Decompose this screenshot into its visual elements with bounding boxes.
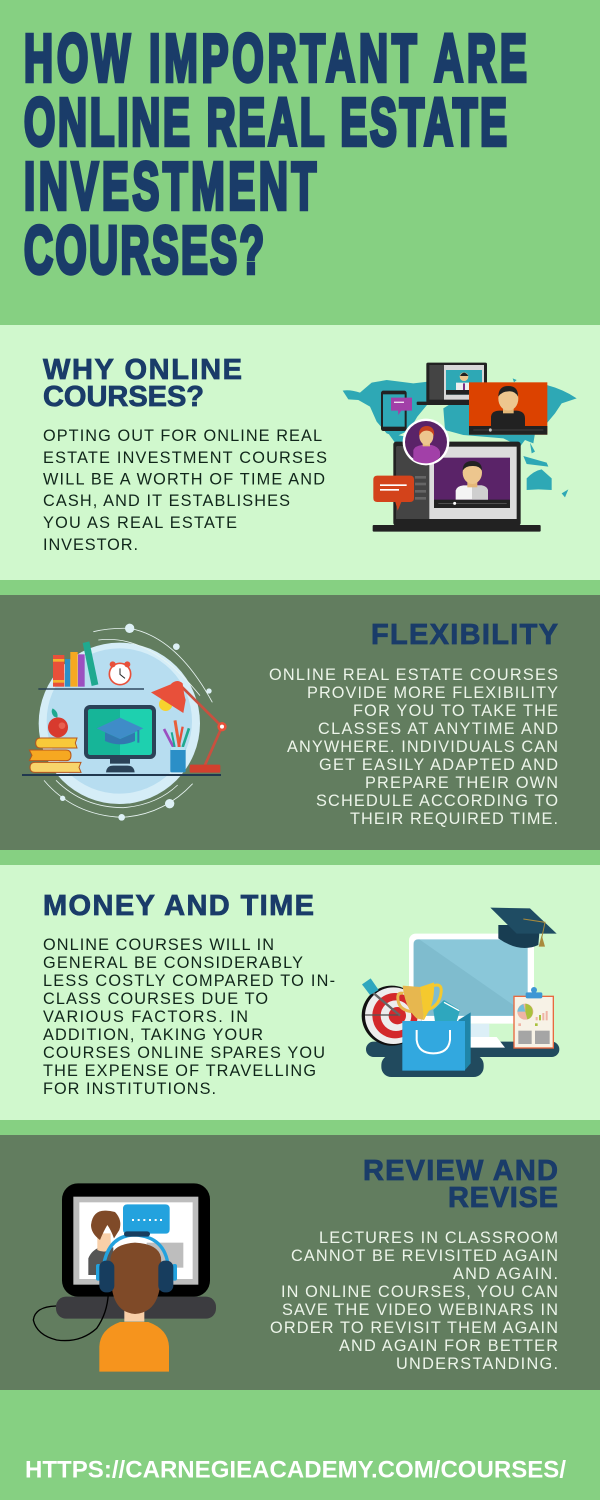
panel: money and time <box>0 865 600 1120</box>
text block: money and time: LESS COSTLY COMPARED TO IN- <box>43 972 335 990</box>
heading: why online courses: COURSES? <box>43 381 204 413</box>
alarm clock <box>109 661 131 685</box>
text block: why online courses: INVESTOR. <box>43 536 138 554</box>
text block: flexibility: SCHEDULE ACCORDING TO <box>316 792 558 810</box>
apple and books <box>29 708 81 772</box>
text block: why online courses: ESTATE INVESTMENT COURSES <box>43 449 327 467</box>
text block: review and revise: CANNOT BE REVISITED AGAIN <box>291 1247 558 1265</box>
text block: review and revise: AND AGAIN FOR BETTER <box>339 1337 558 1355</box>
text block: why online courses: CASH, AND IT ESTABLISHES <box>43 492 290 510</box>
pencil cup <box>164 720 189 772</box>
shelf books <box>38 641 144 690</box>
text block: flexibility: ANYWHERE. INDIVIDUALS CAN <box>287 738 558 756</box>
text block: money and time: ADDITION, TAKING YOUR <box>43 1026 263 1044</box>
text block: flexibility: ONLINE REAL ESTATE COURSES <box>269 666 558 684</box>
text block: flexibility: FOR YOU TO TAKE THE <box>353 702 558 720</box>
text block: money and time: VARIOUS FACTORS. IN <box>43 1008 248 1026</box>
clipboard chart <box>514 987 553 1048</box>
footer url: HTTPS://CARNEGIEACADEMY.COM/COURSES/ <box>25 1456 566 1484</box>
monitor screen <box>62 1183 210 1297</box>
heading: flexibility: FLEXIBILITY <box>371 619 558 651</box>
trophy and folder <box>398 982 460 1022</box>
panel: why online courses <box>0 325 600 580</box>
icon: online video learning over world map <box>343 363 577 532</box>
text block: money and time: FOR INSTITUTIONS. <box>43 1080 216 1098</box>
orange chat bubble <box>373 476 414 511</box>
title: INVESTMENT <box>24 148 316 224</box>
text block: review and revise: SAVE THE VIDEO WEBINARS IN <box>282 1301 558 1319</box>
text block: why online courses <box>43 427 327 554</box>
heading: review and revise <box>363 1155 558 1214</box>
main laptop <box>373 442 541 532</box>
title <box>24 20 527 288</box>
icon: study desk with monitor <box>22 624 227 821</box>
heading: why online courses: WHY ONLINE <box>43 354 242 386</box>
avatar <box>403 419 449 465</box>
text block: why online courses: WILL BE A WORTH OF TIME AND <box>43 470 325 488</box>
text block: why online courses: YOU AS REAL ESTATE <box>43 514 237 532</box>
icon: student with headphones at computer <box>33 1183 216 1372</box>
shopping bag <box>402 1012 471 1071</box>
icon: monitor with target, trophy, bag, clipboard <box>362 908 559 1077</box>
orbit rings <box>44 628 212 817</box>
panel: review and revise <box>0 1135 600 1390</box>
title: COURSES? <box>24 212 264 288</box>
text block: review and revise: ORDER TO REVISIT THEM AGAIN <box>270 1319 558 1337</box>
lamp <box>151 681 227 773</box>
text block: why online courses: OPTING OUT FOR ONLINE REAL <box>43 427 322 445</box>
panel: flexibility <box>0 595 600 850</box>
phone <box>381 391 412 431</box>
text block: money and time: COURSES ONLINE SPARES YOU <box>43 1044 325 1062</box>
text block: money and time: CLASS COURSES DUE TO <box>43 990 268 1008</box>
text block: review and revise: AND AGAIN. <box>453 1265 558 1283</box>
title: HOW IMPORTANT ARE <box>24 20 527 96</box>
text block: flexibility: CLASSES AT ANYTIME AND <box>318 720 558 738</box>
text block: money and time <box>43 936 335 1098</box>
text block: review and revise <box>270 1229 558 1373</box>
heading: money and time: MONEY AND TIME <box>43 890 314 922</box>
heading: why online courses <box>43 354 242 413</box>
text block: money and time: THE EXPENSE OF TRAVELLING <box>43 1062 316 1080</box>
text block: flexibility: THEIR REQUIRED TIME. <box>350 810 558 828</box>
text block: flexibility: GET EASILY ADAPTED AND <box>319 756 558 774</box>
back laptop <box>417 363 487 405</box>
target <box>362 978 422 1046</box>
text block: review and revise: LECTURES IN CLASSROOM <box>319 1229 558 1247</box>
monitor <box>84 705 156 772</box>
text block: review and revise: UNDERSTANDING. <box>396 1355 558 1373</box>
red video window <box>469 382 547 435</box>
text block: flexibility <box>269 666 558 828</box>
text block: money and time: ONLINE COURSES WILL IN <box>43 936 274 954</box>
text block: review and revise: IN ONLINE COURSES, YOU CAN <box>281 1283 558 1301</box>
heading: review and revise: REVISE <box>448 1182 558 1214</box>
text block: flexibility: PROVIDE MORE FLEXIBILITY <box>307 684 558 702</box>
text block: money and time: GENERAL BE CONSIDERABLY <box>43 954 303 972</box>
graduation cap <box>490 908 557 948</box>
title: ONLINE REAL ESTATE <box>24 84 507 160</box>
monitor <box>409 934 534 1048</box>
student <box>96 1231 177 1372</box>
text block: flexibility: PREPARE THEIR OWN <box>365 774 558 792</box>
heading: review and revise: REVIEW AND <box>363 1155 558 1187</box>
